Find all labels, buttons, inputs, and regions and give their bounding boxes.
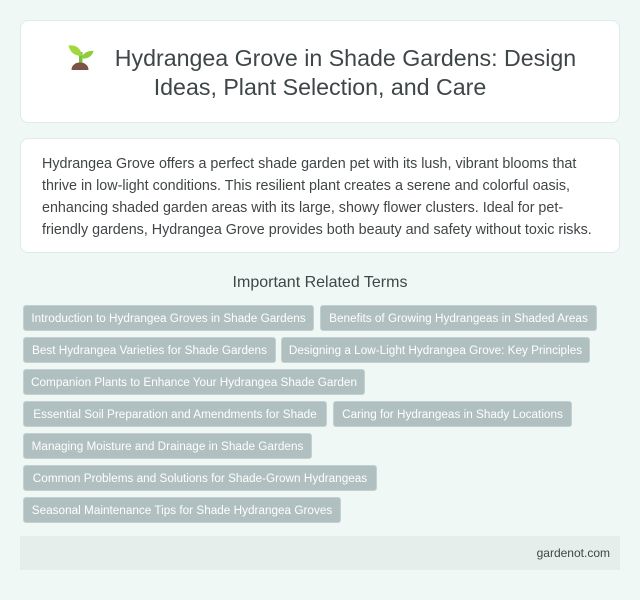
related term tags: Best Hydrangea Varieties for Shade Gardens xyxy=(32,344,267,357)
intro paragraph: thrive in low-light conditions. This resilient plant creates a serene and colorful oasis, xyxy=(42,178,570,194)
title xyxy=(115,45,576,100)
footer source text: gardenot.com xyxy=(537,546,610,560)
related term tags xyxy=(23,305,597,523)
related term tags: Essential Soil Preparation and Amendments for Shade xyxy=(33,408,317,421)
heading: related terms: Important Related Terms xyxy=(233,274,407,291)
icon: seedling xyxy=(68,45,94,70)
intro paragraph: Hydrangea Grove offers a perfect shade garden pet with its lush, vibrant blooms that xyxy=(42,156,576,172)
title: Ideas, Plant Selection, and Care xyxy=(154,74,486,100)
intro paragraph: enhancing shaded garden areas with its large, showy flower clusters. Ideal for pet- xyxy=(42,200,563,216)
intro paragraph: friendly gardens, Hydrangea Grove provides both beauty and safety without toxic risks. xyxy=(42,222,592,238)
intro paragraph xyxy=(42,156,592,238)
related term tags: Introduction to Hydrangea Groves in Shade Gardens xyxy=(31,312,306,325)
related term tags: Common Problems and Solutions for Shade-Grown Hydrangeas xyxy=(33,472,367,485)
related term tags: Managing Moisture and Drainage in Shade Gardens xyxy=(32,440,303,453)
related term tags: Designing a Low-Light Hydrangea Grove: Key Principles xyxy=(289,344,582,357)
related term tags: Companion Plants to Enhance Your Hydrangea Shade Garden xyxy=(31,376,357,389)
footer bar xyxy=(20,536,620,570)
related term tags: Benefits of Growing Hydrangeas in Shaded Areas xyxy=(329,312,588,325)
panel: title card xyxy=(20,20,620,123)
panel: intro text card xyxy=(20,138,620,253)
related term tags: Caring for Hydrangeas in Shady Locations xyxy=(342,408,563,421)
title: Hydrangea Grove in Shade Gardens: Design xyxy=(115,45,576,71)
related term tags: Seasonal Maintenance Tips for Shade Hydrangea Groves xyxy=(32,504,332,517)
